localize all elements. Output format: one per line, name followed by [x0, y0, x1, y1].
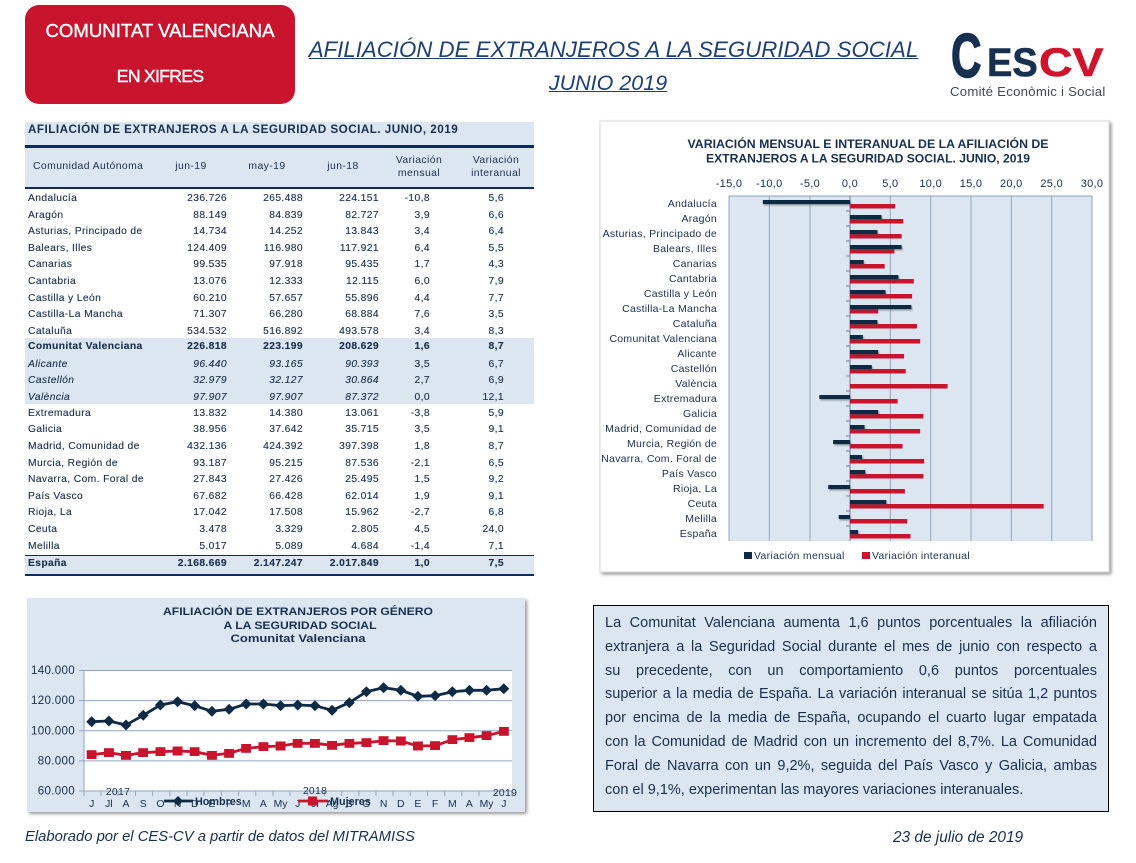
table title — [25, 122, 534, 145]
table rows: Cataluña — [28, 326, 72, 337]
table rows: 3,9 — [415, 210, 430, 221]
table rows: 93.165 — [269, 359, 303, 370]
table rows: Asturias, Principado de — [28, 226, 143, 237]
table rows: 236.726 — [187, 193, 227, 204]
table rows: València — [28, 392, 70, 403]
table rows: 223.199 — [263, 341, 303, 352]
table rows: 2.168.669 — [178, 558, 227, 569]
category labels: Cantabria — [669, 273, 717, 285]
category labels: Cataluña — [673, 318, 717, 330]
panel: bar chart variación mensual e interanual — [600, 120, 1114, 576]
logo: CESCV: CV — [1039, 41, 1103, 85]
top axis labels: -15,0 — [716, 178, 742, 190]
table rows: 37.642 — [269, 424, 303, 435]
legend: Mujeres — [330, 796, 371, 808]
table rows: 99.535 — [193, 259, 227, 270]
data table — [25, 122, 534, 576]
table rows: Navarra, Com. Foral de — [28, 474, 144, 485]
table rows: Extremadura — [28, 408, 91, 419]
table rows: 7,5 — [489, 558, 504, 569]
title: AFILIACIÓN DE EXTRANJEROS A LA SEGURIDAD SOCIAL — [309, 37, 918, 62]
badge: Comunitat Valenciana en xifres: COMUNITAT VALENCIANA — [45, 20, 274, 41]
bars: variación mensual — [763, 200, 911, 534]
x axis labels: J — [89, 799, 94, 810]
table rows: 13.843 — [345, 226, 379, 237]
table rows: 14.734 — [193, 226, 227, 237]
chart title: VARIACIÓN MENSUAL E INTERANUAL DE LA AFILIACIÓN DE — [688, 136, 1048, 151]
chart title: EXTRANJEROS A LA SEGURIDAD SOCIAL. JUNIO, 2019 — [706, 152, 1030, 166]
x axis labels: O — [156, 799, 164, 810]
table rows: 516.892 — [263, 326, 303, 337]
table rows: 12,1 — [482, 392, 504, 403]
top axis labels: 15,0 — [960, 178, 982, 190]
year labels: 2019 — [493, 788, 517, 799]
table rows: 2.017.849 — [330, 558, 379, 569]
top axis labels: -10,0 — [756, 178, 783, 190]
logo: CESCV: C — [950, 22, 981, 91]
table rows: 6,5 — [489, 458, 504, 468]
table rows: 6,0 — [415, 276, 430, 287]
table title: AFILIACIÓN DE EXTRANJEROS A LA SEGURIDAD SOCIAL. JUNIO, 2019 — [28, 123, 458, 136]
table rows: -3,8 — [411, 408, 430, 419]
text block: commentary: superior a la media de España. La variación interanual se sitúa 1,2 puntos — [605, 686, 1097, 702]
table rows: Cantabria — [28, 276, 76, 287]
table rows: 17.508 — [269, 507, 303, 518]
subtitle: JUNIO 2019 — [549, 71, 667, 95]
x axis labels: F — [432, 799, 438, 810]
x axis labels: Ag — [326, 799, 339, 810]
table rows: 208.629 — [339, 341, 379, 352]
table header: jun-19 — [175, 161, 207, 172]
table rows: 224.151 — [339, 193, 379, 204]
logo: CESCV: ES — [987, 41, 1038, 85]
table rows: Madrid, Comunidad de — [28, 441, 140, 452]
badge: Comunitat Valenciana en xifres: EN XIFRES — [117, 66, 203, 86]
table rows: 5,6 — [489, 193, 504, 204]
category labels: Aragón — [681, 213, 717, 225]
table rows: -10,8 — [405, 193, 430, 204]
table rows: 12.333 — [269, 276, 303, 287]
series: hombres — [92, 688, 504, 725]
category labels: Ceuta — [688, 498, 717, 510]
chart title — [163, 605, 433, 645]
plot area — [79, 670, 512, 796]
table rows: 12.115 — [346, 276, 379, 287]
table rows: 7,1 — [489, 540, 504, 552]
table rows: 66.428 — [269, 491, 303, 502]
table header: may-19 — [248, 161, 286, 172]
table rows: 4,3 — [489, 259, 504, 270]
table rows: 97.907 — [193, 392, 227, 403]
category labels: Alicante — [677, 348, 717, 360]
table rows: 7,7 — [489, 292, 504, 304]
bars: variación interanual — [850, 204, 1044, 538]
table rows: 8,7 — [489, 441, 504, 452]
text block: commentary: Foral de Navarra con un 9,2%, seguida del País Vasco y Galicia, ambas — [605, 758, 1097, 774]
top axis labels: 20,0 — [1000, 178, 1023, 190]
table rows: Galicia — [28, 424, 62, 435]
year labels: 2017 — [106, 787, 130, 798]
chart title: AFILIACIÓN DE EXTRANJEROS POR GÉNERO — [163, 605, 433, 618]
category labels: Castellón — [671, 363, 717, 375]
y axis labels — [31, 664, 75, 798]
table rows: 30.864 — [345, 375, 379, 386]
y axis labels: 80.000 — [38, 754, 75, 768]
table rows: Melilla — [28, 540, 60, 552]
y axis labels: 60.000 — [38, 784, 75, 798]
table rows: 1,9 — [415, 491, 430, 502]
table rows: 2,7 — [415, 375, 430, 386]
year labels — [106, 786, 517, 799]
table rows: 534.532 — [187, 326, 227, 337]
x axis labels: A — [466, 799, 473, 810]
text block: commentary: con la Comunidad de Madrid con un incremento del 8,7%. La Comunidad — [605, 734, 1097, 750]
table rows: País Vasco — [28, 491, 83, 502]
series: mujeres — [92, 731, 504, 755]
category labels: Asturias, Principado de — [603, 228, 717, 240]
table rows: 32.979 — [193, 375, 227, 386]
category labels: España — [680, 528, 717, 540]
category labels — [601, 198, 717, 540]
table rows: 13.076 — [193, 276, 227, 287]
top axis labels: 10,0 — [919, 178, 942, 190]
table rows: Canarias — [28, 259, 72, 270]
table rows: 88.149 — [193, 210, 227, 221]
top axis labels — [716, 178, 1103, 190]
badge: Comunitat Valenciana en xifres — [25, 5, 295, 104]
table rows: 3,4 — [415, 326, 430, 337]
category labels: Murcia, Región de — [627, 438, 717, 450]
top axis labels: 0,0 — [842, 178, 858, 190]
x axis labels: S — [140, 799, 147, 810]
table rows: 3,4 — [415, 226, 430, 237]
table rows: 95.215 — [269, 458, 303, 468]
table rows: 1,0 — [415, 558, 430, 569]
chart title — [688, 136, 1048, 166]
table rows: 14.252 — [269, 226, 303, 237]
x axis labels: My — [274, 799, 288, 810]
text block: commentary: con el 9,1%, experimentan las mayores variaciones interanuales. — [605, 782, 1023, 798]
table rows: 14.380 — [269, 408, 303, 419]
table rows: 9,1 — [489, 491, 504, 502]
table rows: 62.014 — [345, 491, 379, 502]
table rows: 3.329 — [275, 524, 303, 535]
legend — [164, 796, 371, 808]
table rows: 60.210 — [193, 292, 227, 304]
chart title: A LA SEGURIDAD SOCIAL — [224, 620, 377, 632]
table rows: -2,1 — [411, 458, 430, 468]
category labels: País Vasco — [662, 468, 717, 480]
table rows: 0,0 — [415, 392, 430, 403]
category labels: Balears, Illes — [653, 243, 717, 255]
category labels: Castilla-La Mancha — [622, 303, 717, 315]
table rows: 4,4 — [415, 292, 430, 304]
table rows: 55.896 — [345, 292, 379, 304]
table rows: 13.832 — [193, 408, 227, 419]
table rows: Balears, Illes — [28, 243, 92, 254]
x axis labels: F — [226, 799, 232, 810]
table header: jun-18 — [327, 161, 359, 172]
table rows: 6,6 — [489, 210, 504, 221]
table rows: 424.392 — [263, 441, 303, 452]
y axis labels: 120.000 — [31, 694, 75, 707]
table rows: 8,7 — [489, 341, 504, 352]
x axis labels: Jl — [311, 799, 319, 810]
table rows: 9,2 — [489, 474, 504, 485]
plot background and grid — [729, 196, 1092, 541]
footer: date: 23 de julio de 2019 — [893, 829, 1023, 846]
table rows — [25, 193, 534, 576]
x axis labels: A — [260, 799, 267, 810]
table rows: 87.372 — [345, 392, 379, 403]
table rows: Ceuta — [28, 524, 57, 535]
table rows: 4.684 — [351, 540, 379, 552]
category labels: Extremadura — [654, 393, 717, 405]
footer: source: Elaborado por el CES-CV a partir de datos del MITRAMISS — [25, 829, 415, 845]
table rows: 124.409 — [187, 243, 227, 254]
x axis labels: J — [295, 799, 300, 810]
x axis labels: My — [480, 799, 494, 810]
table rows: 17.042 — [193, 507, 227, 518]
table rows: 2.805 — [351, 524, 379, 535]
table rows: Alicante — [28, 359, 68, 370]
legend: Variación mensual — [754, 551, 845, 562]
table rows: 432.136 — [187, 441, 227, 452]
table rows: 97.918 — [269, 259, 303, 270]
table rows: 84.839 — [269, 210, 303, 221]
legend: Variación interanual — [872, 551, 970, 562]
table rows: 5.017 — [199, 540, 227, 552]
table rows: 4,5 — [415, 524, 430, 535]
table rows: 6,4 — [489, 226, 504, 237]
table header — [25, 145, 534, 189]
table rows: 226.818 — [187, 341, 227, 352]
table rows: 7,6 — [415, 309, 430, 320]
x axis labels: J — [501, 799, 506, 810]
table rows: 5,5 — [489, 243, 504, 254]
table rows: 3,5 — [415, 359, 430, 370]
y axis labels: 100.000 — [31, 724, 75, 738]
text block: commentary — [593, 605, 1109, 812]
text block: commentary: su precedente, con un comportamiento 0,6 puntos porcentuales — [605, 663, 1097, 679]
table rows: 82.727 — [345, 210, 379, 221]
table rows: 6,9 — [489, 375, 504, 386]
table rows: 95.435 — [345, 259, 379, 270]
text block: commentary: extranjera a la Seguridad Social durante el mes de junio con respecto a — [605, 639, 1097, 655]
table rows: 6,4 — [415, 243, 430, 254]
table rows: 265.488 — [263, 193, 303, 204]
top axis labels: -5,0 — [800, 178, 820, 190]
table rows: 27.426 — [269, 474, 303, 485]
table rows: 93.187 — [193, 458, 227, 468]
table rows: 71.307 — [193, 309, 227, 320]
table rows: 9,1 — [489, 424, 504, 435]
table rows: 1,8 — [415, 441, 430, 452]
table rows: 493.578 — [339, 326, 379, 337]
table rows: 116.980 — [264, 243, 303, 254]
table rows: 1,7 — [415, 259, 430, 270]
table rows: 397.398 — [339, 441, 379, 452]
category labels: Comunitat Valenciana — [609, 333, 717, 345]
table rows: 3,5 — [415, 424, 430, 435]
x axis labels: E — [414, 799, 421, 810]
x axis labels: A — [123, 799, 130, 810]
y axis labels: 140.000 — [31, 664, 75, 677]
top axis labels: 25,0 — [1040, 178, 1063, 190]
x axis labels — [89, 799, 506, 810]
x axis labels: Jl — [105, 799, 113, 810]
category labels: Rioja, La — [673, 483, 717, 495]
table header: mensual — [398, 168, 440, 179]
x axis labels: D — [191, 799, 198, 810]
table rows: 3,5 — [489, 309, 504, 320]
table rows: 7,9 — [489, 276, 504, 287]
text block: commentary: por encima de la media de España, ocupando el cuarto lugar empatada — [605, 710, 1097, 726]
table rows: 1,6 — [415, 341, 430, 352]
table rows: 90.393 — [345, 359, 379, 370]
x axis labels: N — [380, 799, 387, 810]
table rows: 8,3 — [489, 326, 504, 337]
table header: Variación — [396, 155, 442, 166]
category labels: Navarra, Com. Foral de — [601, 453, 717, 465]
category labels: Andalucía — [668, 198, 717, 210]
table header: Comunidad Autónoma — [33, 161, 143, 172]
x axis labels: N — [174, 799, 181, 810]
table rows: 5.089 — [275, 540, 303, 552]
table rows: Murcia, Región de — [28, 458, 118, 468]
table rows: Castellón — [28, 375, 74, 386]
table rows: 3.478 — [199, 524, 227, 535]
table rows: 2.147.247 — [254, 558, 303, 569]
table rows: 32.127 — [269, 375, 303, 386]
table rows: 6,8 — [489, 507, 504, 518]
category labels: Castilla y León — [644, 288, 717, 300]
table header: interanual — [471, 168, 521, 179]
table rows: 68.884 — [345, 309, 379, 320]
table rows: -2,7 — [411, 507, 430, 518]
table header: Variación — [473, 155, 519, 166]
table rows: Castilla y León — [28, 292, 101, 304]
x axis labels: M — [242, 799, 251, 810]
top axis labels: 30,0 — [1081, 178, 1103, 190]
logo: CESCV — [950, 22, 1106, 99]
table rows: Rioja, La — [28, 507, 72, 518]
legend — [744, 551, 970, 562]
table rows: 5,9 — [489, 408, 504, 419]
panel: line chart afiliación por género — [27, 598, 529, 816]
chart title: Comunitat Valenciana — [230, 633, 367, 645]
top axis labels: 5,0 — [882, 178, 898, 190]
table rows: 38.956 — [193, 424, 227, 435]
table rows: 57.657 — [269, 292, 303, 304]
table rows: 24,0 — [482, 524, 504, 535]
table rows: 67.682 — [193, 491, 227, 502]
table rows: 1,5 — [415, 474, 430, 485]
table rows: 15.962 — [345, 507, 379, 518]
table rows: 66.280 — [269, 309, 303, 320]
table rows: Comunitat Valenciana — [28, 341, 143, 352]
year labels: 2018 — [303, 786, 327, 797]
text block: commentary: La Comunitat Valenciana aumenta 1,6 puntos porcentuales la afiliación — [605, 615, 1097, 631]
table rows: 27.843 — [193, 474, 227, 485]
table rows: 117.921 — [340, 243, 379, 254]
category labels: València — [675, 378, 717, 390]
table rows: Castilla-La Mancha — [28, 309, 123, 320]
table rows: Aragón — [28, 210, 63, 221]
category labels: Galicia — [683, 408, 717, 420]
table rows: 25.495 — [345, 474, 379, 485]
x axis labels: O — [362, 799, 370, 810]
table rows: Andalucía — [28, 193, 77, 204]
legend: Hombres — [195, 796, 242, 808]
table rows: 87.536 — [345, 458, 379, 468]
table rows: España — [28, 558, 67, 569]
table rows: 97.907 — [269, 392, 303, 403]
category labels: Madrid, Comunidad de — [605, 423, 717, 435]
table rows: 6,7 — [489, 359, 504, 370]
category labels: Melilla — [685, 513, 717, 525]
table rows: 96.440 — [193, 359, 227, 370]
table rows: -1,4 — [411, 540, 430, 552]
logo: CESCV: Comité Econòmic i Social — [950, 84, 1106, 99]
table rows: 13.061 — [345, 408, 379, 419]
x axis labels: E — [208, 799, 215, 810]
x axis labels: S — [346, 799, 353, 810]
x axis labels: M — [448, 799, 457, 810]
table rows: 35.715 — [345, 424, 379, 435]
x axis labels: D — [397, 799, 405, 810]
category labels: Canarias — [673, 258, 717, 270]
